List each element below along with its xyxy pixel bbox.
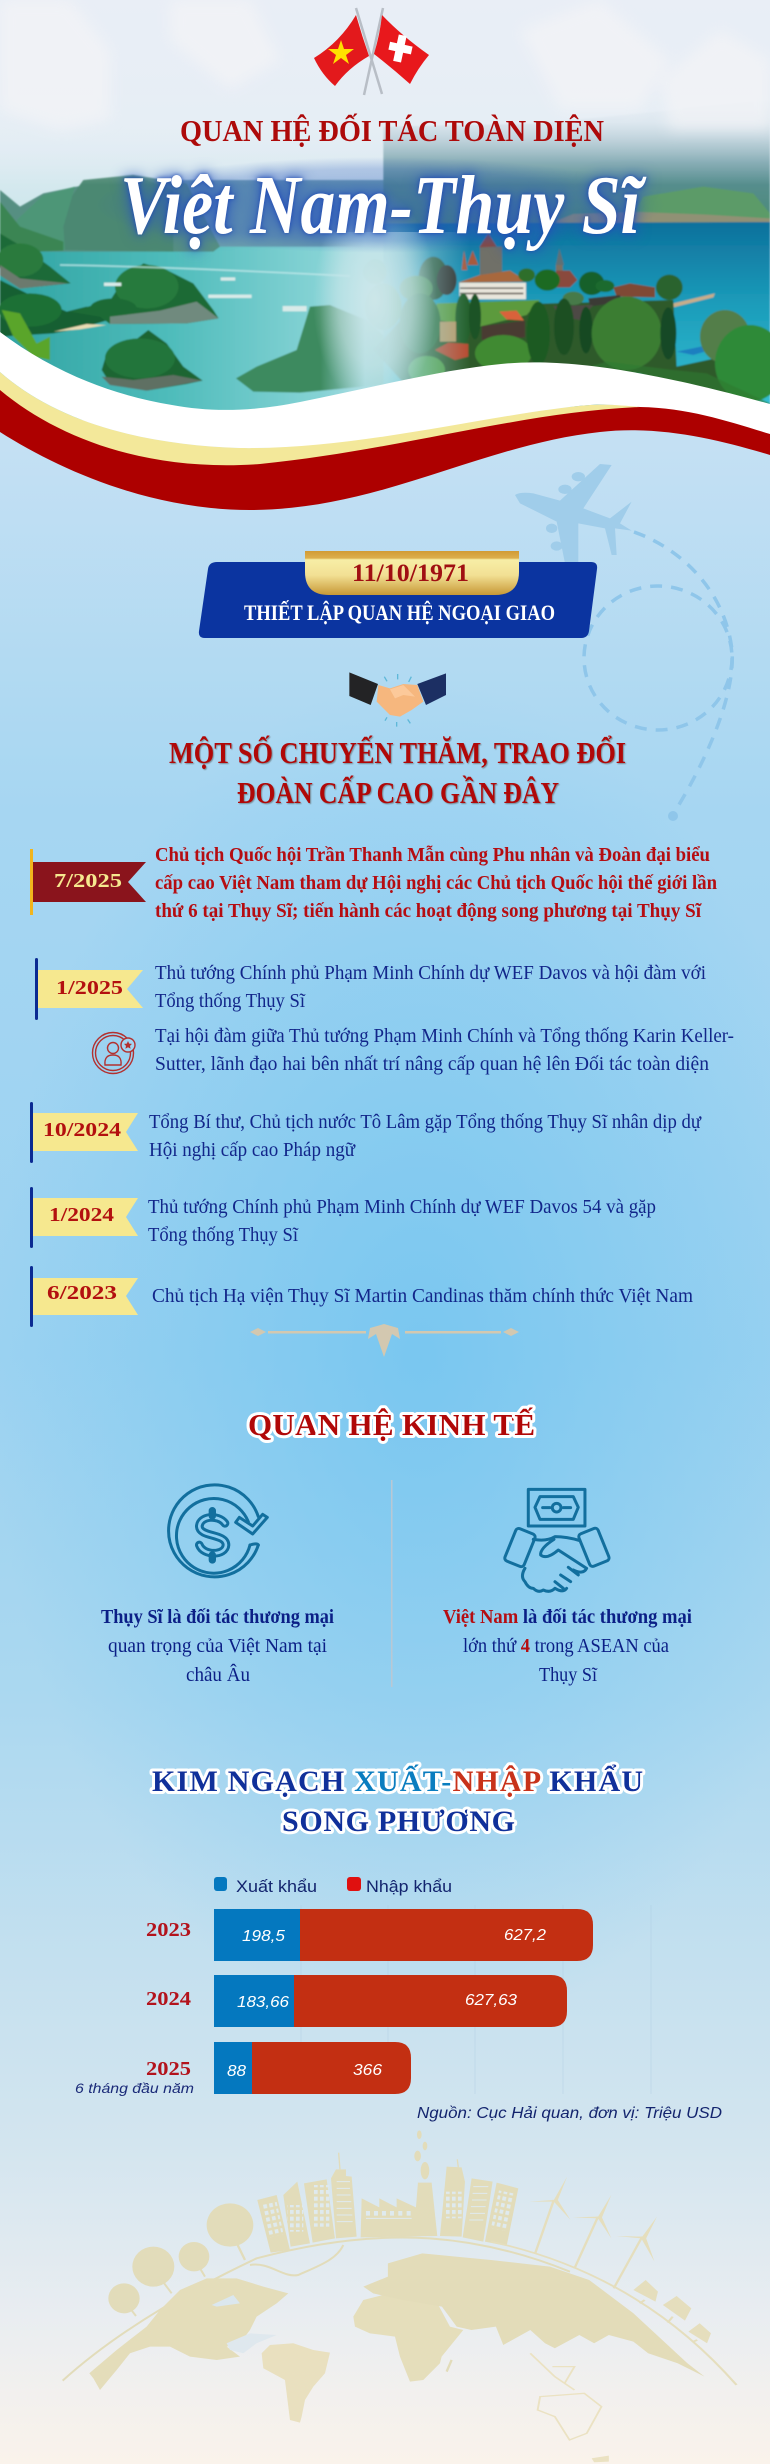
chart legend (214, 1877, 452, 1896)
divider line between partners (391, 1480, 392, 1687)
description (148, 1196, 656, 1246)
hero sky (0, 0, 770, 206)
date: 11/10/1971 (352, 560, 469, 587)
bar 2024: 183,66 (237, 1994, 289, 2011)
description: Tổng Bí thư, Chủ tịch nước Tô Lâm gặp Tổng thống Thụy Sĩ nhân dịp dự (149, 1111, 702, 1133)
white ribbon (0, 332, 770, 448)
bar 2025: 366 (353, 2062, 382, 2079)
fog blend over the photo (85, 100, 770, 394)
timeline item 6/2023 (30, 1266, 693, 1327)
banner: establishment date (199, 551, 597, 638)
hero banner (0, 0, 770, 433)
bar 2025: 6 tháng đầu năm (75, 2080, 194, 2096)
blue plate (199, 562, 597, 638)
date: 1/2024 (49, 1204, 114, 1226)
text: Switzerland partner: châu Âu (186, 1663, 250, 1686)
source note: Nguồn: Cục Hải quan, đơn vị: Triệu USD (417, 2105, 722, 2122)
flag: Vietnam (314, 15, 369, 86)
red ribbon (0, 388, 770, 510)
text: Vietnam partner: Việt Nam là đối tác thương mại (443, 1606, 692, 1628)
description: Thủ tướng Chính phủ Phạm Minh Chính dự WEF Davos và hội đàm với (155, 962, 706, 984)
text: Vietnam partner (443, 1606, 692, 1686)
note: upgrade to comprehensive partnership: Tại hội đàm giữa Thủ tướng Phạm Minh Chính và Tổng thống Karin Keller- (155, 1025, 734, 1047)
caption: THIẾT LẬP QUAN HỆ NGOẠI GIAO (244, 600, 555, 625)
heading: visits: MỘT SỐ CHUYẾN THĂM, TRAO ĐỔI (169, 734, 626, 770)
flags (314, 8, 429, 95)
chart heading (152, 1764, 643, 1838)
bar 2024: 2024 (146, 1988, 191, 2010)
globe right half (363, 2177, 736, 2462)
bar 2023: 627,2 (504, 1927, 546, 1944)
castle (458, 233, 577, 299)
icon: dollar cycle (169, 1485, 267, 1577)
date ribbon (33, 1278, 138, 1315)
text: Switzerland partner: quan trọng của Việt Nam tại (108, 1635, 327, 1657)
icon: handshake (349, 672, 446, 727)
bar 2025 (75, 2042, 411, 2096)
description (155, 844, 718, 922)
hero subtitle: QUAN HỆ ĐỐI TÁC TOÀN DIỆN (180, 112, 604, 148)
bar chart (75, 1905, 651, 2096)
text: Switzerland partner (101, 1606, 334, 1686)
description: Chủ tịch Quốc hội Trần Thanh Mẫn cùng Phu nhân và Đoàn đại biểu (155, 844, 710, 866)
text: Switzerland partner: Thụy Sĩ là đối tác thương mại (101, 1606, 334, 1628)
hero photo: bay on the left (0, 174, 384, 420)
globe left half (63, 2130, 570, 2423)
gold tab (305, 551, 519, 595)
ornament divider (250, 1324, 519, 1357)
timeline item 10/2024 (30, 1102, 702, 1163)
bar 2025: 2025 (146, 2058, 191, 2080)
note: upgrade to comprehensive partnership: Sutter, lãnh đạo hai bên nhất trí nâng cấp quan hệ lên Đối tác toàn diện (155, 1053, 709, 1075)
timeline item 1/2024 (30, 1187, 656, 1248)
legend: export: Xuất khẩu (236, 1877, 317, 1896)
icon: leader profile (92, 1032, 135, 1074)
text: Vietnam partner: Thụy Sĩ (539, 1664, 597, 1686)
hero title: Việt Nam-Thụy Sĩ (120, 159, 647, 252)
legend: import: Nhập khẩu (366, 1877, 452, 1896)
date ribbon (38, 970, 143, 1008)
description: cấp cao Việt Nam tham dự Hội nghị các Chủ tịch Quốc hội thế giới lần (155, 872, 718, 894)
icon: money handshake (504, 1489, 610, 1591)
chart heading: SONG PHƯƠNG (282, 1805, 515, 1838)
hero photo: lake and town on the right (382, 121, 770, 407)
flag: Switzerland (374, 15, 429, 84)
date: 1/2025 (56, 977, 123, 999)
bar 2024 (146, 1975, 567, 2027)
text: Vietnam partner: lớn thứ 4 trong ASEAN của (463, 1635, 669, 1657)
bar 2023: 198,5 (242, 1928, 285, 1945)
date ribbon (33, 1198, 138, 1236)
world graphic (63, 2130, 736, 2462)
description: Tổng thống Thụy Sĩ (155, 990, 306, 1012)
description (155, 962, 706, 1012)
description: Thủ tướng Chính phủ Phạm Minh Chính dự WEF Davos 54 và gặp (148, 1196, 656, 1218)
date: 10/2024 (43, 1119, 121, 1141)
description (149, 1111, 702, 1161)
description: thứ 6 tại Thụy Sĩ; tiến hành các hoạt động song phương tại Thụy Sĩ (155, 900, 702, 922)
description: Chủ tịch Hạ viện Thụy Sĩ Martin Candinas thăm chính thức Việt Nam (152, 1285, 693, 1307)
bar 2023: 2023 (146, 1919, 191, 1941)
faint world map in the sky (0, 0, 770, 130)
heading: visits (169, 734, 626, 810)
date ribbon (33, 862, 146, 902)
chart heading: KIM NGẠCH XUẤT-NHẬP KHẨU (152, 1764, 643, 1798)
note: upgrade to comprehensive partnership (155, 1025, 734, 1075)
swoosh ribbons (0, 332, 770, 510)
bar 2024: 627,63 (465, 1992, 517, 2009)
heading: visits: ĐOÀN CẤP CAO GẦN ĐÂY (237, 774, 559, 810)
date: 6/2023 (47, 1282, 117, 1304)
timeline item 1/2025 (35, 958, 706, 1020)
date: 7/2025 (54, 870, 122, 892)
plane (515, 464, 632, 563)
yellow ribbon (0, 372, 640, 465)
date ribbon (33, 1113, 138, 1151)
bar 2023 (146, 1909, 593, 1961)
description: Tổng thống Thụy Sĩ (148, 1224, 299, 1246)
timeline item 7/2025 (30, 844, 718, 922)
dashed flight path (584, 532, 732, 821)
description: Hội nghị cấp cao Pháp ngữ (149, 1139, 356, 1161)
town trees and roofs (408, 268, 770, 406)
bar 2025: 88 (227, 2063, 246, 2080)
heading: economic relations: QUAN HỆ KINH TẾ (248, 1406, 535, 1442)
